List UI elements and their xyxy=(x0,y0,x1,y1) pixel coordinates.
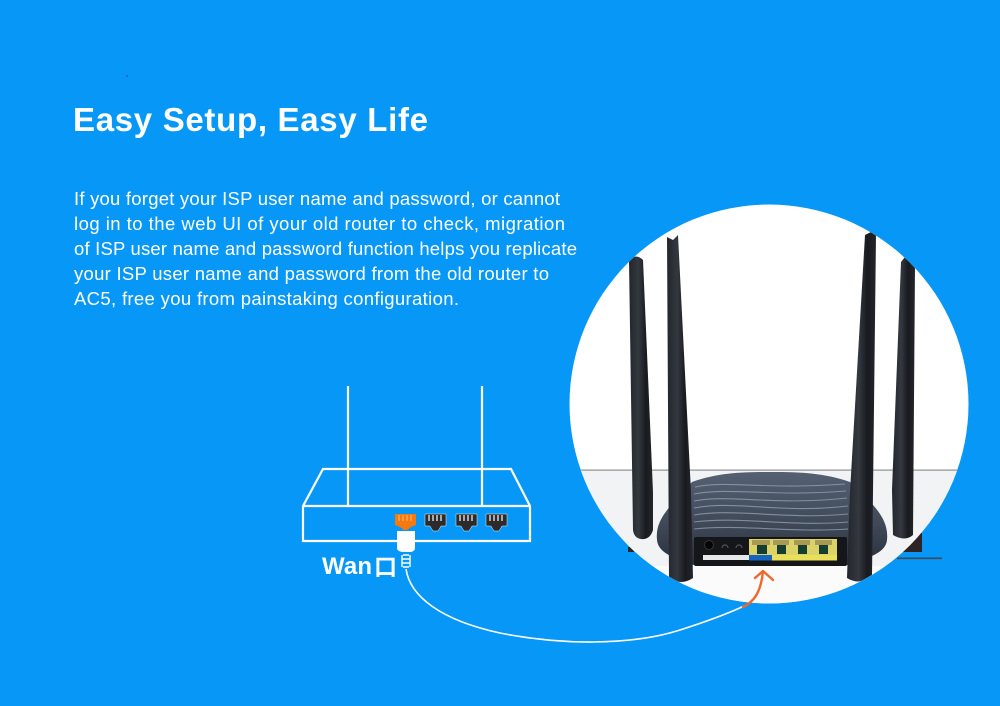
back panel with ports xyxy=(694,537,847,566)
Wan port label: Wan xyxy=(322,553,372,580)
icon: LAN ports xyxy=(425,514,507,531)
speck xyxy=(126,76,128,77)
Wan port label glyph: 口 xyxy=(374,548,397,582)
antennas xyxy=(629,256,653,539)
description text: If you forget your ISP user name and password, or cannot xyxy=(74,188,560,209)
description text: of ISP user name and password function helps you replicate xyxy=(74,238,577,259)
icon: ethernet plug xyxy=(397,531,415,552)
cable xyxy=(406,569,744,642)
description text: AC5, free you from painstaking configuration. xyxy=(74,288,459,309)
title: Easy Setup, Easy Life xyxy=(73,101,428,138)
description text: your ISP user name and password from the old router to xyxy=(74,263,549,284)
router line diagram xyxy=(303,386,530,567)
photo remnants outside circle xyxy=(628,533,942,559)
orange arrow xyxy=(743,571,773,607)
icon: orange WAN port xyxy=(395,514,416,530)
router body xyxy=(657,472,887,565)
description text: log in to the web UI of your old router to check, migration xyxy=(74,213,565,234)
router photo in circle xyxy=(560,195,980,615)
description text xyxy=(74,188,577,309)
